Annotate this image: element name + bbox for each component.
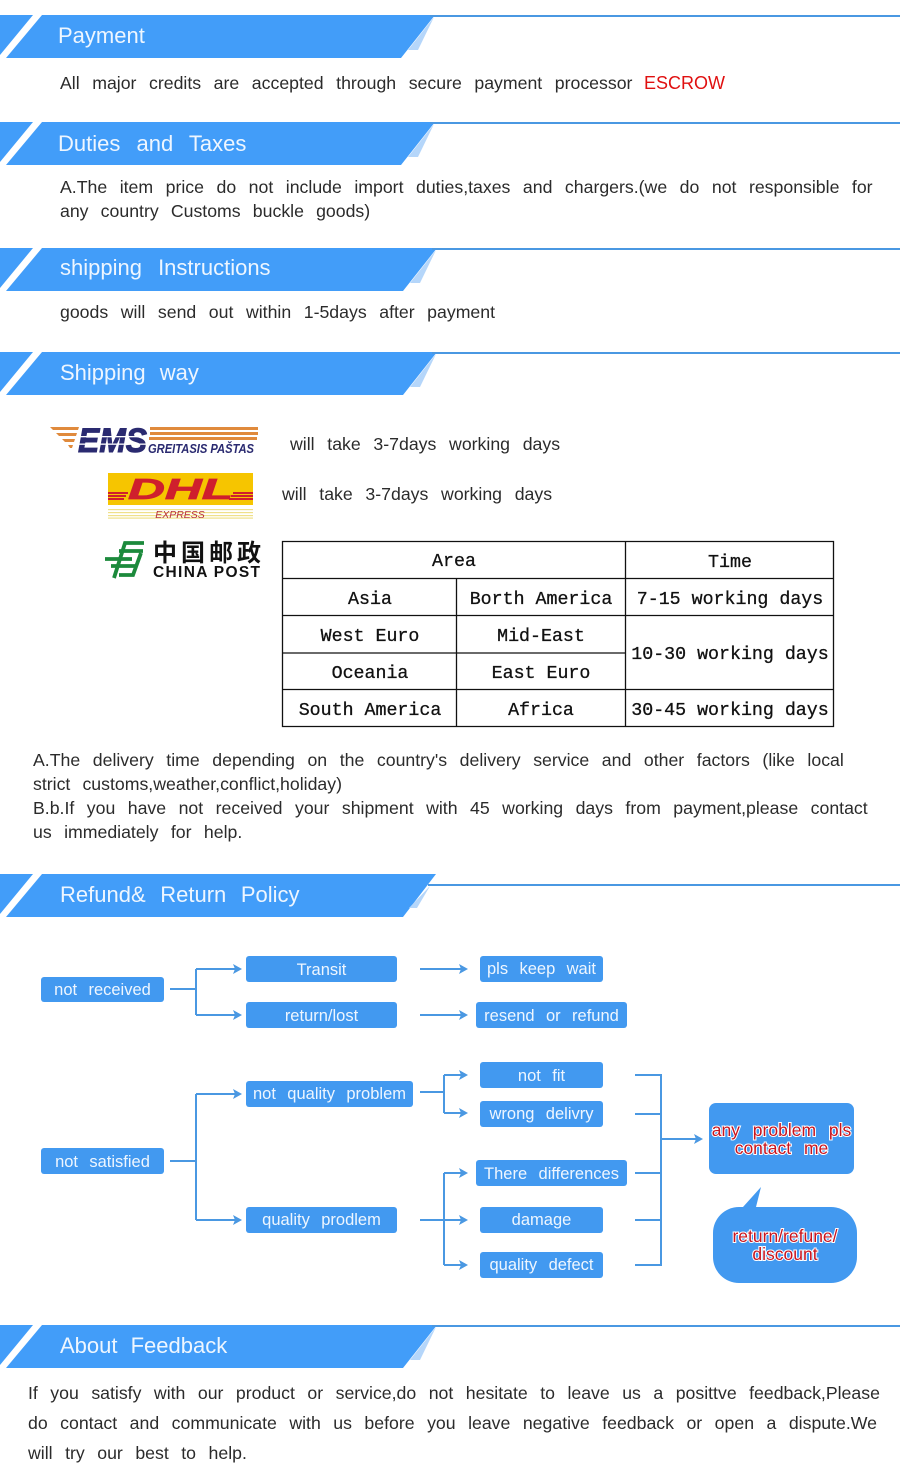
table: delivery times: Area xyxy=(432,552,476,572)
icon: EMS logo: EMS xyxy=(78,422,147,460)
flowchart: not satisfied branch: wrong delivry xyxy=(488,1105,594,1123)
table: delivery times: 10-30 working days xyxy=(631,645,829,665)
table: delivery times: West Euro xyxy=(321,627,419,647)
text: shipping time: goods will send out within 1-5days after payment xyxy=(60,302,495,322)
text: duties details xyxy=(60,177,873,221)
text: delivery notes: us immediately for help. xyxy=(33,822,242,842)
panel: shipping instructions xyxy=(0,248,900,322)
flowchart: not received branch: return/lost xyxy=(285,1007,359,1025)
heading: Duties and Taxes xyxy=(0,122,900,165)
icon: China Post logo xyxy=(105,533,261,581)
heading: Duties and Taxes: Duties and Taxes xyxy=(58,131,246,156)
text: payment details: All major credits are accepted through secure payment processor xyxy=(60,73,632,93)
panel: shipping way xyxy=(0,352,900,842)
icon: DHL logo: DHL xyxy=(128,474,233,506)
callout: any problem contact me: any problem pls xyxy=(712,1120,852,1140)
heading: About Feedback: About Feedback xyxy=(60,1333,228,1358)
callout: return refund discount: discount xyxy=(752,1244,818,1264)
flowchart: not received branch: resend or refund xyxy=(484,1007,619,1025)
icon: China Post logo: 中国邮政 xyxy=(153,533,261,568)
text: EMS time: will take 3-7days working days xyxy=(289,434,560,454)
table: delivery times: 7-15 working days xyxy=(637,590,823,610)
table: delivery times: Borth America xyxy=(470,590,612,610)
panel: about feedback xyxy=(0,1325,900,1463)
icon: DHL logo xyxy=(108,473,253,521)
flowchart: not satisfied branch: not fit xyxy=(518,1067,565,1085)
text: feedback details: If you satisfy with our product or service,do not hesitate to leave us a posittve feedback,Please xyxy=(28,1383,880,1403)
panel: refund and return policy xyxy=(0,874,900,1283)
callout: any problem contact me: contact me xyxy=(735,1138,828,1158)
panel: payment xyxy=(0,15,900,93)
text: delivery notes: B.b.If you have not received your shipment with 45 working days from payment,please contact xyxy=(33,798,868,818)
heading: About Feedback xyxy=(0,1325,900,1368)
flowchart: not received branch: Transit xyxy=(297,961,347,979)
text: DHL time: will take 3-7days working days xyxy=(281,484,552,504)
icon: DHL logo: EXPRESS xyxy=(155,509,205,521)
table: delivery times: South America xyxy=(299,701,441,721)
flowchart: not satisfied branch: not satisfied xyxy=(55,1153,150,1171)
heading: shipping Instructions: shipping Instructions xyxy=(60,255,271,280)
icon: China Post logo: CHINA POST xyxy=(153,564,261,581)
table: delivery times: 30-45 working days xyxy=(631,701,829,721)
text: feedback details: will try our best to help. xyxy=(27,1443,247,1463)
flowchart: not received branch: pls keep wait xyxy=(487,960,596,978)
heading: Refund and Return Policy xyxy=(0,874,900,917)
icon: EMS logo xyxy=(50,422,258,460)
flowchart: not received branch xyxy=(41,956,627,1028)
flowchart: not satisfied branch: damage xyxy=(512,1211,571,1229)
text: payment details: ESCROW xyxy=(644,73,725,93)
text: delivery notes: A.The delivery time depending on the country's delivery service and other factors (like local xyxy=(33,750,844,770)
table: delivery times xyxy=(282,542,834,726)
heading: Shipping way xyxy=(0,352,900,395)
table: delivery times: Mid-East xyxy=(497,627,585,647)
heading: shipping Instructions xyxy=(0,248,900,291)
icon: EMS logo: GREITASIS PAŠTAS xyxy=(148,441,255,456)
text: feedback details xyxy=(27,1383,880,1463)
text: duties details: A.The item price do not include import duties,taxes and chargers.(we do not responsible for xyxy=(60,177,873,197)
table: delivery times: Africa xyxy=(508,701,574,721)
table: delivery times: Oceania xyxy=(332,664,408,684)
text: feedback details: do contact and communicate with us before you leave negative feedback or open a dispute.We xyxy=(28,1413,877,1433)
callout: return refund discount: return/refune/ xyxy=(732,1226,838,1246)
flowchart: not satisfied branch xyxy=(41,1062,627,1278)
flowchart: not satisfied branch: not quality problem xyxy=(253,1085,406,1103)
flowchart: not satisfied branch: quality prodlem xyxy=(262,1211,381,1229)
flowchart: not received branch: not received xyxy=(54,981,151,999)
heading: Payment xyxy=(0,15,900,58)
callout: any problem contact me xyxy=(709,1103,854,1174)
text: duties details: any country Customs buckle goods) xyxy=(60,201,370,221)
flowchart: not satisfied branch: quality defect xyxy=(489,1256,594,1274)
table: delivery times: Time xyxy=(708,553,752,573)
panel: duties and taxes xyxy=(0,122,900,221)
text: delivery notes xyxy=(33,750,868,842)
arrow: bracket to contact box xyxy=(635,1074,703,1266)
heading: Payment: Payment xyxy=(58,23,145,48)
table: delivery times: East Euro xyxy=(492,664,590,684)
flowchart: not satisfied branch: There differences xyxy=(484,1165,619,1183)
heading: Refund and Return Policy: Refund& Return Policy xyxy=(60,882,300,907)
callout: return refund discount xyxy=(713,1187,857,1283)
text: delivery notes: strict customs,weather,conflict,holiday) xyxy=(33,774,342,794)
table: delivery times: Asia xyxy=(348,590,392,610)
heading: Shipping way: Shipping way xyxy=(60,360,199,385)
